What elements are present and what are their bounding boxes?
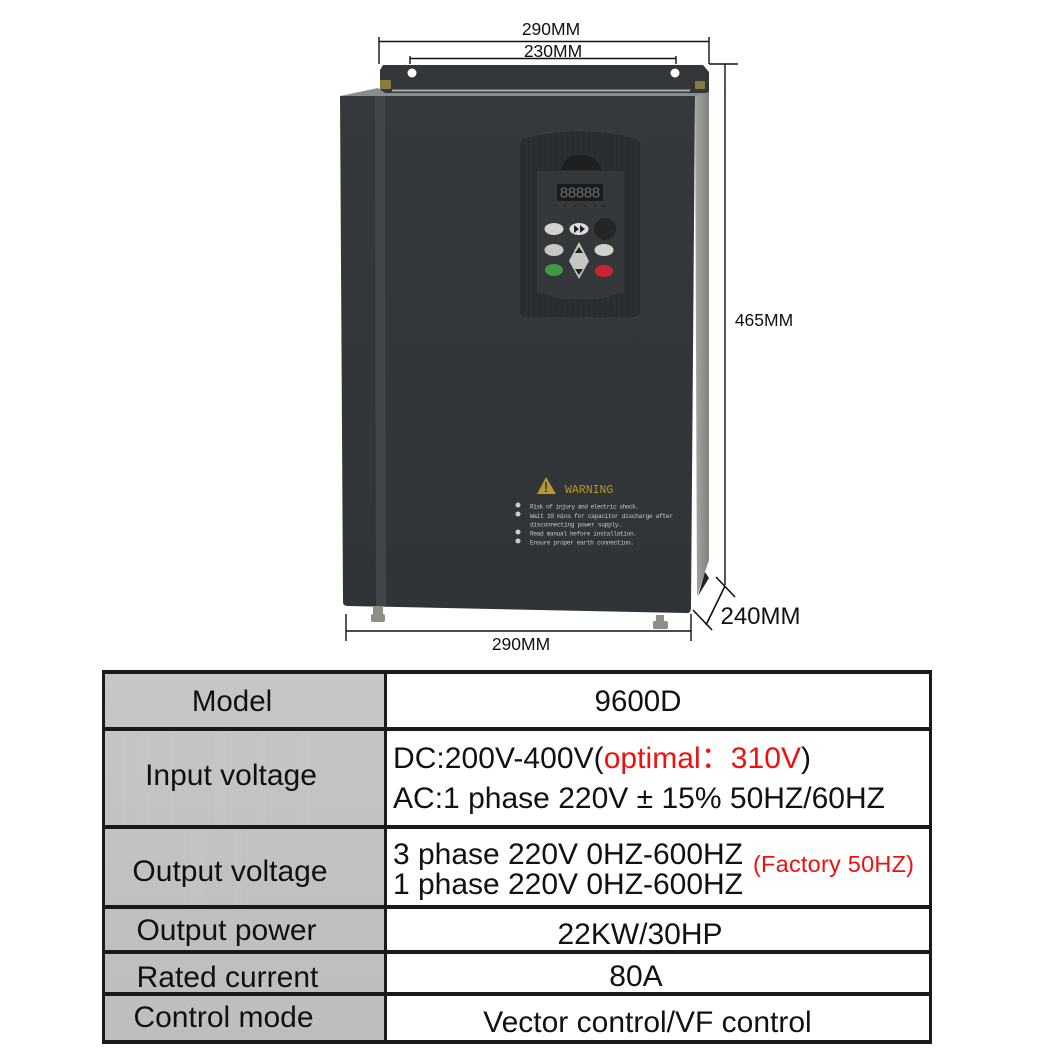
label column [103, 672, 385, 1042]
row: rated current: Rated current [137, 961, 319, 994]
corner seam [375, 96, 386, 606]
row: model: Model [192, 685, 272, 718]
warning label: disconnecting power supply. [530, 522, 622, 528]
front panel [340, 96, 695, 613]
row: rated current [137, 960, 663, 994]
row: control mode: Vector control/VF control [483, 1006, 812, 1039]
warning label: Ensure proper earth connection. [530, 540, 634, 546]
warning label [516, 477, 673, 546]
side panel [695, 92, 709, 596]
feet [371, 606, 668, 629]
warning label: Read manual before installation. [530, 530, 637, 538]
mounting plate [380, 65, 709, 96]
row: output voltage: (Factory 50HZ) [753, 851, 914, 877]
row: input voltage [145, 742, 885, 815]
row: rated current: 80A [609, 960, 663, 993]
row: output voltage: 1 phase 220V 0HZ-600HZ [393, 868, 743, 901]
row: output power: 22KW/30HP [557, 918, 723, 951]
warning label: Risk of injury and electric shock. [530, 504, 639, 510]
display: 88888 [560, 186, 600, 202]
warning label: WARNING [565, 484, 613, 497]
dimension: hole spacing 230MM: 230MM [524, 41, 582, 61]
control panel housing [519, 130, 641, 318]
specification table [102, 670, 932, 1044]
dimension: height 465MM: 465MM [735, 310, 793, 330]
warning label: Wait 10 mins for capacitor discharge after [530, 513, 673, 520]
dimension: top width 290MM: 290MM [522, 19, 580, 39]
product: inverter [340, 65, 709, 629]
top edge [340, 88, 709, 96]
keypad [544, 218, 616, 279]
dimension: bottom width 290MM [346, 614, 691, 654]
row: input voltage: DC:200V-400V(optimal：310V) [393, 742, 811, 775]
dimension: height 465MM [709, 64, 793, 585]
row: output voltage [132, 838, 914, 901]
indicator lights [554, 205, 605, 207]
row: input voltage: Input voltage [145, 759, 317, 792]
table grid [102, 670, 932, 1044]
dimension: depth 240MM: 240MM [720, 603, 801, 630]
row: model [192, 685, 681, 718]
row: output power [136, 914, 723, 951]
row: control mode: Control mode [133, 1001, 314, 1034]
row: control mode [133, 1001, 812, 1039]
dimension: bottom width 290MM: 290MM [492, 634, 550, 654]
row: model: 9600D [595, 685, 681, 718]
row: output power: Output power [136, 914, 317, 947]
dimension: depth 240MM [693, 577, 801, 630]
dimension: top width 290MM [379, 19, 709, 64]
dimension: hole spacing 230MM [410, 41, 676, 64]
row: output voltage: 3 phase 220V 0HZ-600HZ [393, 838, 743, 871]
row: output voltage: Output voltage [132, 855, 328, 888]
row: input voltage: AC:1 phase 220V ± 15% 50HZ/60HZ [393, 782, 885, 815]
